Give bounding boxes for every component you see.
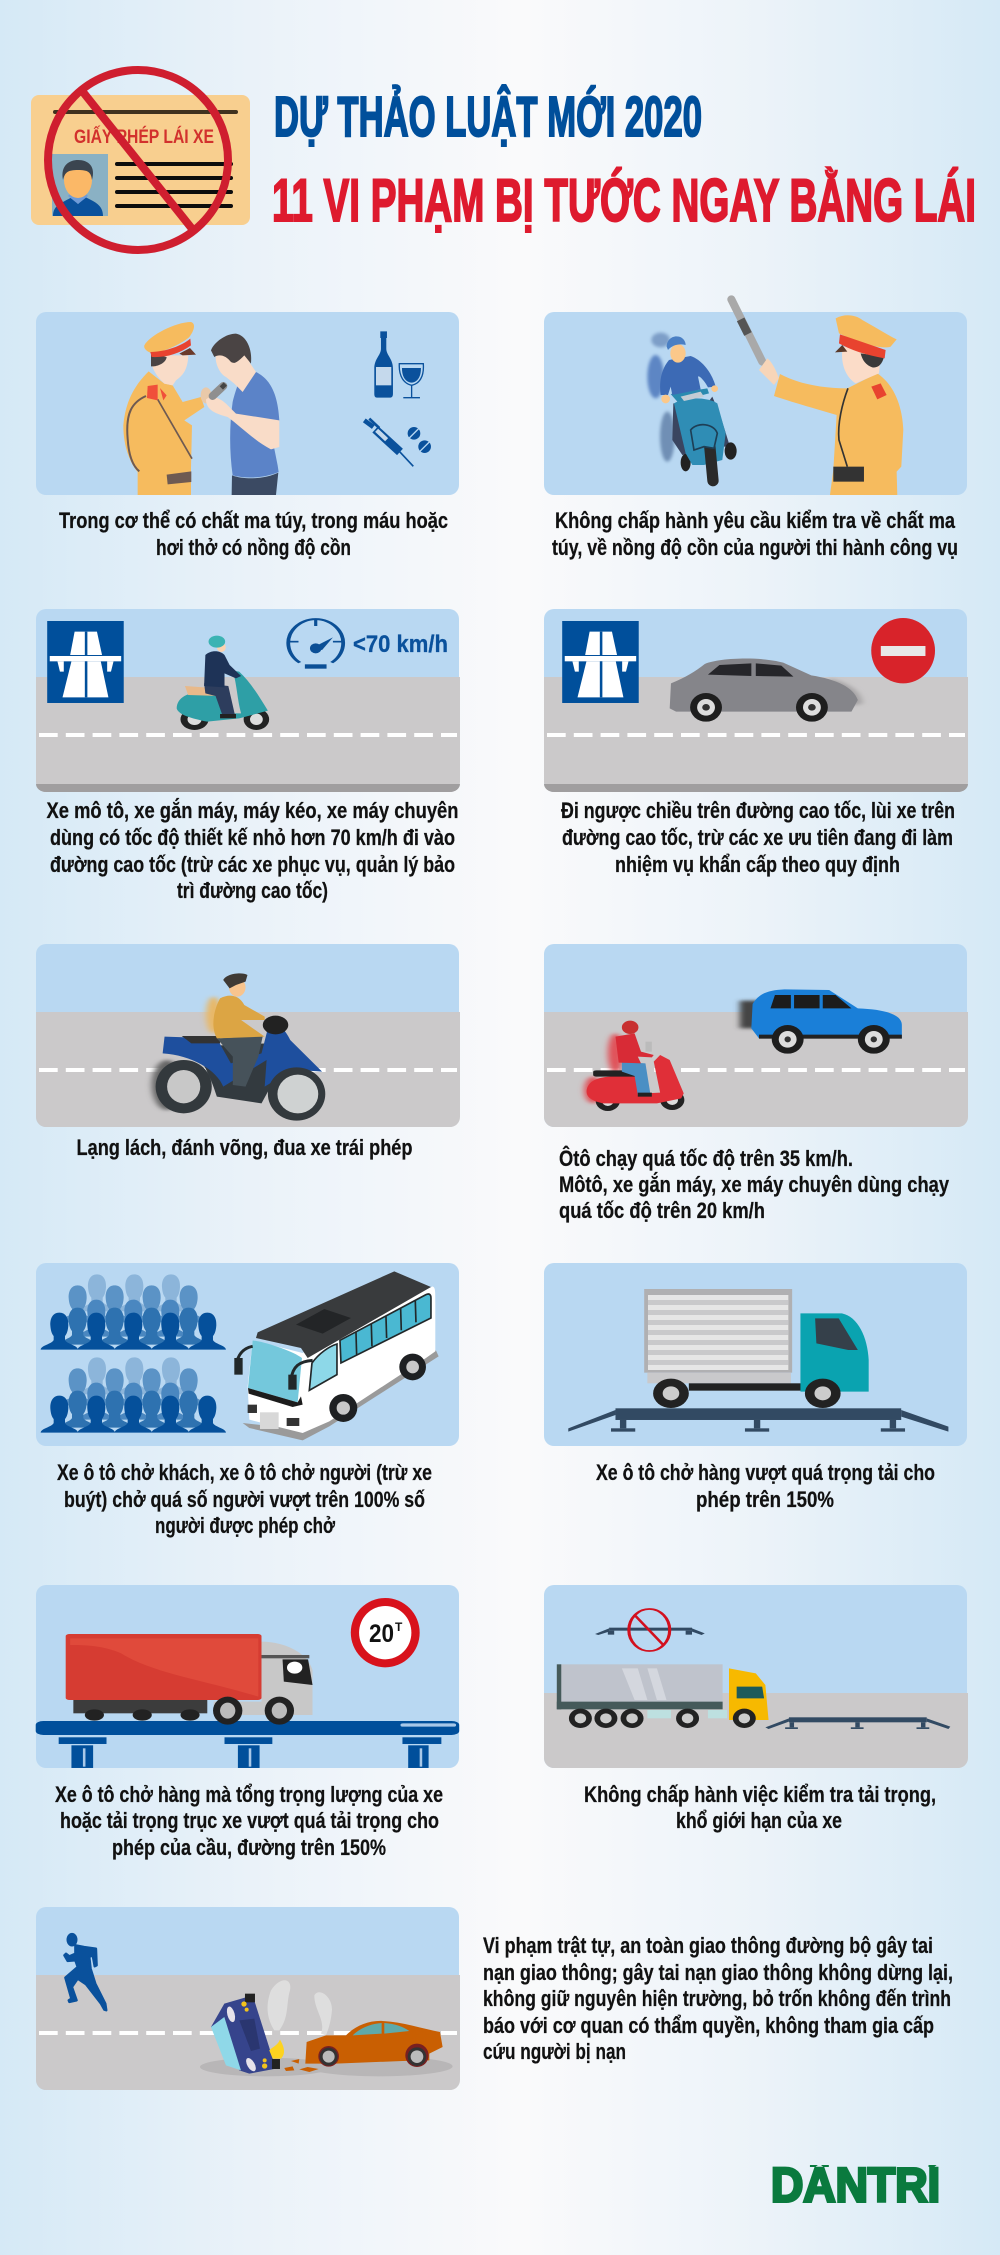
icon: expressway sign [47, 621, 124, 703]
panel: reckless motorbike [36, 944, 460, 1127]
panel: overloaded bridge [36, 1585, 459, 1768]
text: caption 1: Trong cơ thể có chất ma túy, trong máu hoặc [59, 508, 448, 533]
text: caption 10: Không chấp hành việc kiểm tra tải trọng, [584, 1782, 936, 1807]
illustration: red scooter [584, 1021, 684, 1111]
text: caption 7: người được phép chở [155, 1513, 335, 1538]
text: caption 7 [57, 1460, 432, 1538]
text: caption 10: khổ giới hạn của xe [676, 1808, 842, 1833]
icon: prohibition circle [48, 70, 228, 250]
text: caption 3: đường cao tốc (trừ các xe phục vụ, quản lý bảo [50, 852, 455, 877]
text: caption 3: Xe mô tô, xe gắn máy, máy kéo, xe máy chuyên [46, 798, 458, 823]
illustration: semi-trailer truck [557, 1664, 769, 1728]
illustration: rider on scooter [647, 333, 737, 481]
text: caption 6: quá tốc độ trên 20 km/h [559, 1198, 765, 1223]
text: caption 4 [561, 798, 955, 877]
panel: hit and run [36, 1907, 460, 2090]
text: caption 4: nhiệm vụ khẩn cấp theo quy định [615, 852, 900, 877]
illustration: teal box truck [644, 1289, 869, 1408]
illustration: car crash [200, 1980, 453, 2076]
text: caption 8 [596, 1460, 935, 1512]
title [272, 84, 976, 234]
text: caption 3 [46, 798, 458, 903]
icon: license card [31, 95, 250, 225]
panel: refusing load check [544, 1585, 968, 1768]
icon: running figure [64, 1934, 106, 2010]
icon: no weighbridge [595, 1609, 705, 1651]
icon: 20 ton limit sign: T [395, 1620, 403, 1634]
text: caption 3: dùng có tốc độ thiết kế nhỏ hơn 70 km/h đi vào [50, 825, 455, 850]
panel: refusing inspection [544, 299, 967, 495]
text: caption 6: Ôtô chạy quá tốc độ trên 35 km/h. [559, 1146, 853, 1171]
text: caption 1: hơi thở có nồng độ cồn [156, 535, 351, 560]
panel: overloaded passengers [36, 1263, 459, 1446]
illustration: empty weighbridge [765, 1717, 950, 1729]
text: caption 3: trì đường cao tốc) [177, 878, 328, 903]
icon: speedometer [288, 619, 343, 669]
illustration: officer signalling with baton [731, 299, 903, 495]
icon: wine bottle and glass [374, 331, 423, 398]
header: license icon [31, 70, 250, 250]
illustration: grey car [670, 659, 862, 722]
logo: Dân Trí: DÂNTRÍ [771, 2158, 942, 2212]
icon: license card: GIẤY PHÉP LÁI XE [74, 126, 214, 148]
text: caption 7: Xe ô tô chở khách, xe ô tô chở người (trừ xe [57, 1460, 432, 1485]
icon: syringe and pills [364, 419, 431, 466]
illustration: officer testing driver [123, 322, 279, 495]
text: caption 1 [59, 508, 448, 560]
text: caption 6 [559, 1146, 950, 1223]
text: caption 2 [552, 508, 958, 560]
text: caption 10 [584, 1782, 936, 1833]
text: caption 9: Xe ô tô chở hàng mà tổng trọng lượng của xe [55, 1782, 443, 1807]
text: caption 11: cứu người bị nạn [483, 2039, 626, 2064]
label: speed limit: <70 km/h [353, 631, 448, 658]
icon: 20 ton limit sign: 20 [369, 1620, 394, 1648]
text: caption 9: phép của cầu, đường trên 150% [112, 1835, 386, 1860]
illustration: blue car [740, 989, 902, 1054]
illustration: scooter rider [177, 636, 269, 730]
illustration: crowds of passengers [41, 1274, 226, 1433]
text: caption 8: phép trên 150% [696, 1487, 834, 1512]
illustration: motorbike rider [152, 973, 325, 1121]
illustration: red truck [66, 1634, 313, 1725]
text: caption 9: hoặc tải trọng trục xe vượt quá tải trọng cho [60, 1808, 439, 1833]
panel: speeding [544, 944, 968, 1127]
icon: expressway sign [562, 621, 639, 703]
icon: 20 ton limit sign [351, 1598, 420, 1667]
panel: low speed vehicles on expressway [36, 609, 460, 792]
panel: overloaded truck [544, 1263, 967, 1446]
text: caption 7: buýt) chở quá số người vượt trên 100% số [64, 1487, 425, 1512]
panel: alcohol and drug test [36, 312, 459, 495]
illustration: coach bus [234, 1271, 439, 1440]
illustration: bridge deck and pillars [36, 1721, 459, 1768]
text: caption 5: Lạng lách, đánh võng, đua xe trái phép [76, 1135, 412, 1160]
icon: no entry sign [871, 618, 935, 683]
title line 1: DỰ THẢO LUẬT MỚI 2020 [274, 84, 702, 149]
panel: wrong way on expressway [544, 609, 968, 792]
text: caption 9 [55, 1782, 443, 1860]
illustration: weighbridge platform [568, 1408, 948, 1432]
text: caption 11 [483, 1933, 953, 2064]
